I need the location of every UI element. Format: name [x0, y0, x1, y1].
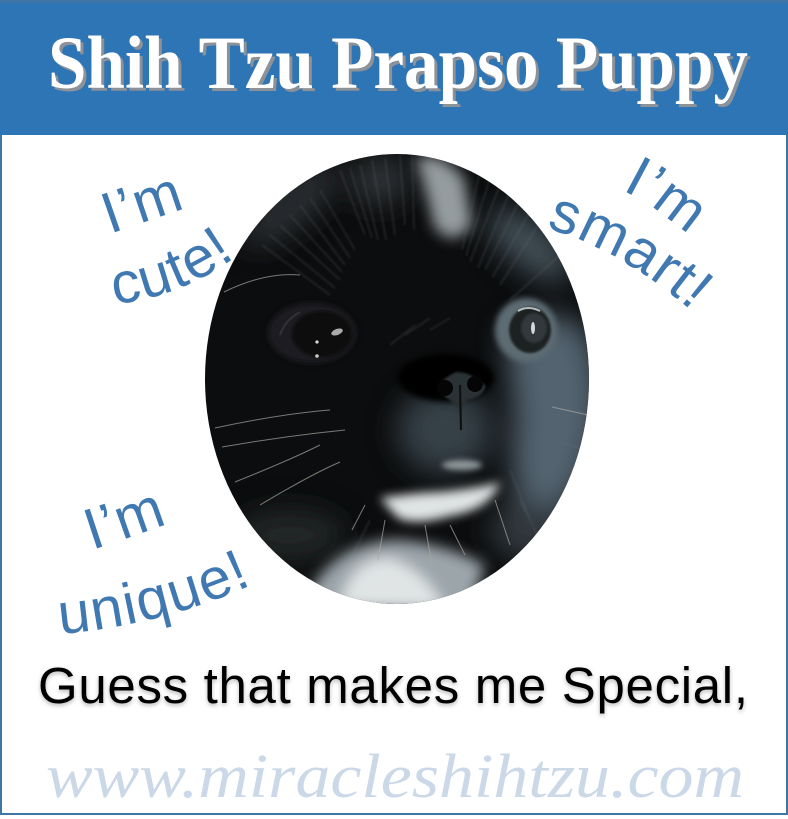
header banner: [0, 0, 788, 135]
white chest: [310, 540, 485, 612]
callout: I'm unique!: unique!: [60, 550, 248, 634]
website address: www.miracleshihtzu.com: [46, 743, 744, 811]
nose: [398, 354, 494, 430]
left eye: [268, 303, 356, 363]
head crown streak: [416, 156, 472, 238]
fur strands: [262, 156, 558, 548]
grey fur masses: [230, 150, 600, 561]
title: Shih Tzu Prapso Puppy: [51, 25, 751, 108]
callout: I'm smart!: smart!: [550, 202, 714, 308]
tagline: Guess that makes me Special,: [38, 657, 748, 714]
callout: I'm smart!: I’m: [626, 157, 702, 232]
callout: I'm cute!: [102, 182, 231, 303]
callout: I'm unique!: I’m: [84, 498, 164, 548]
mouth highlight: [442, 460, 482, 470]
callout: I'm unique!: [60, 498, 248, 634]
whiskers: [215, 275, 588, 565]
right eye: [495, 298, 557, 362]
white chin: [380, 482, 500, 522]
callout: I'm cute!: I’m: [102, 182, 182, 232]
callout: I'm cute!: cute!: [114, 227, 231, 303]
puppy photo oval: [200, 150, 600, 612]
title: Shih Tzu Prapso Puppy: [48, 22, 748, 105]
